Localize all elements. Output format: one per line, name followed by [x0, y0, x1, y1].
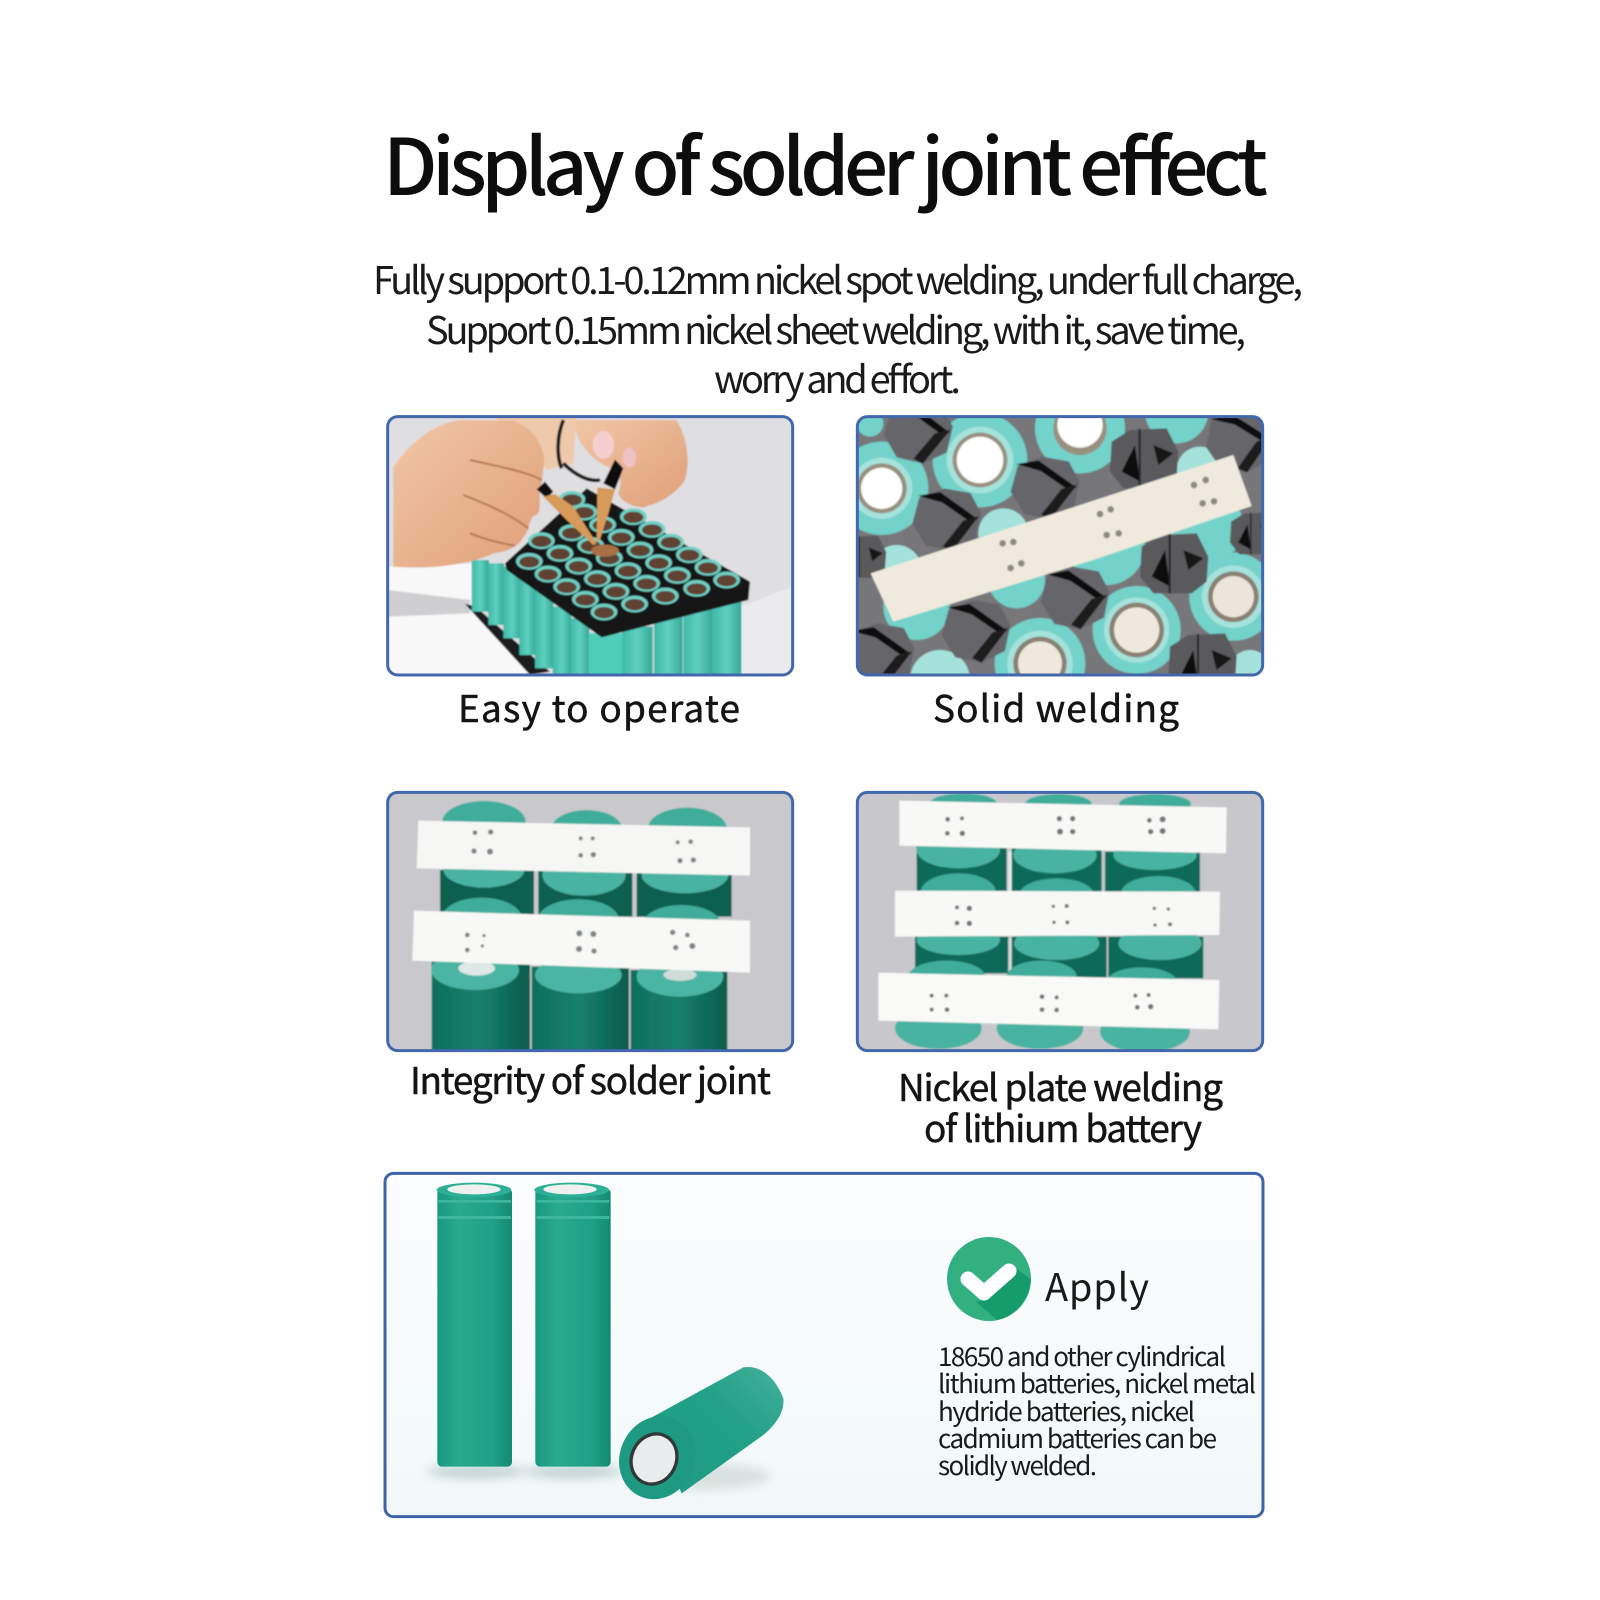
- intro paragraph: [373, 250, 1303, 404]
- caption: nickel plate welding: [898, 1058, 1223, 1153]
- upper row cells: [439, 800, 733, 920]
- battery middle: [534, 1183, 611, 1467]
- cell rings: [858, 418, 1262, 674]
- cells row three: [895, 961, 1190, 1052]
- cell top rings: [516, 491, 740, 620]
- weld points: [999, 477, 1217, 571]
- cells row one and two: [915, 793, 1203, 978]
- caption: nickel plate welding: of lithium battery: [924, 1099, 1202, 1153]
- caption: solid welding: Solid welding: [933, 679, 1179, 733]
- weld points: [930, 816, 1172, 1012]
- panel border: [857, 417, 1263, 675]
- battery lying: [619, 1367, 784, 1500]
- apply description: 18650 and other cylindrical: [938, 1337, 1226, 1374]
- lower row cells: [430, 960, 728, 1050]
- nickel strip: [871, 455, 1252, 622]
- panel border: [388, 417, 793, 675]
- photo background: [388, 417, 793, 675]
- apply description: hydride batteries, nickel: [938, 1392, 1195, 1429]
- caption: easy to operate: Easy to operate: [458, 679, 740, 733]
- caption: nickel plate welding: Nickel plate welding: [898, 1058, 1223, 1112]
- panel: apply: [385, 1173, 1263, 1517]
- intro paragraph: Fully support 0.1-0.12mm nickel spot welding, under full charge,: [373, 250, 1303, 305]
- panel: integrity photo: [388, 792, 793, 1052]
- left hand: [393, 420, 544, 568]
- panel border: [857, 792, 1263, 1051]
- panel: solid welding photo: [856, 415, 1264, 676]
- apply description: [938, 1337, 1256, 1483]
- nickel strips: [417, 821, 750, 876]
- apply description: solidly welded.: [938, 1446, 1097, 1483]
- panel: easy to operate photo: [388, 417, 793, 675]
- right hand: [573, 420, 688, 507]
- shadows: [427, 1463, 770, 1490]
- battery cells: [465, 560, 741, 675]
- panel border: [385, 1173, 1263, 1517]
- intro paragraph: worry and effort.: [714, 349, 961, 404]
- weld points: [465, 829, 696, 954]
- title: Display of solder joint effect: [383, 106, 1268, 218]
- apply description: cadmium batteries can be: [938, 1419, 1217, 1456]
- nickel strips: [899, 801, 1227, 853]
- icon: green check: [947, 1237, 1031, 1321]
- cell holder: [505, 488, 750, 637]
- caption: integrity of solder joint: Integrity of solder joint: [410, 1051, 771, 1105]
- wrist and strap: [493, 417, 577, 470]
- welding pens: [537, 482, 553, 498]
- panel: nickel plate welding photo: [857, 792, 1263, 1052]
- panel border: [388, 792, 793, 1051]
- battery left: [437, 1183, 512, 1467]
- intro paragraph: Support 0.15mm nickel sheet welding, with it, save time,: [426, 300, 1246, 355]
- label: apply: Apply: [1045, 1257, 1149, 1312]
- plastic holder pieces: [838, 396, 1278, 693]
- apply description: lithium batteries, nickel metal: [938, 1364, 1256, 1401]
